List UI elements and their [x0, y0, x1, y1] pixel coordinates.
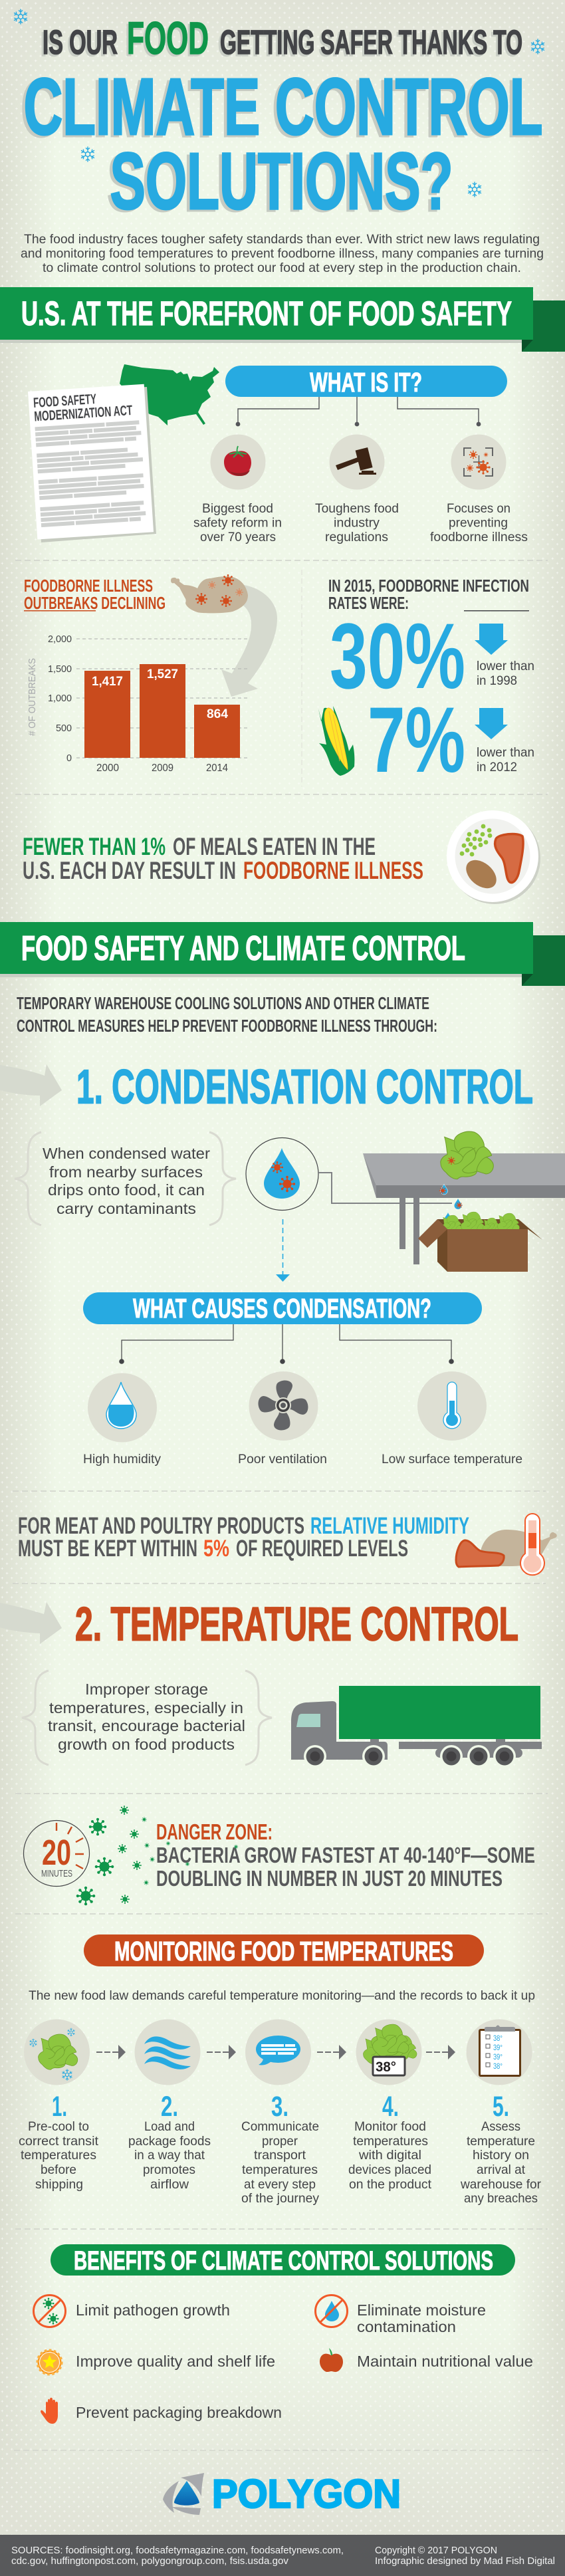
heading: outbreaks declining: [24, 576, 166, 613]
step 3 icon: [245, 2020, 311, 2085]
brace text: condensed water: drips onto food, it can: [48, 1181, 205, 1199]
footer: cdc.gov, huffingtonpost.com, polygongroup.com, fsis.usda.gov: [11, 2555, 288, 2567]
footer: Copyright © 2017 POLYGON: [375, 2545, 497, 2556]
step 4: monitor: with digital: [358, 2148, 421, 2163]
icon: 20 minute clock: 20: [42, 1833, 71, 1873]
axis title: # OF OUTBREAKS: [27, 658, 38, 736]
intro: temporary warehouse cooling: [17, 993, 437, 1036]
what is it captions: preventing: [449, 516, 508, 530]
heading: outbreaks declining: FOODBORNE ILLNESS: [24, 576, 153, 596]
benefit: improve quality: [37, 2351, 275, 2375]
what is it captions: [193, 501, 528, 544]
benefit: nutritional value: [320, 2348, 533, 2372]
step 2: load and package: in a way that: [134, 2148, 205, 2163]
what is it captions: Biggest food: [202, 501, 273, 516]
pill: what is it: [225, 366, 507, 398]
document: Food Safety Modernization Act: MODERNIZATION ACT: [34, 403, 133, 424]
banner: food safety and climate control: [0, 922, 565, 986]
brace text: condensed water: [15, 1132, 236, 1225]
axis labels: 1,500: [48, 664, 72, 675]
callout: fewer than 1 percent: OF MEALS EATEN IN THE: [173, 833, 376, 860]
title: [21, 13, 542, 228]
benefit: eliminate moisture contamination: contamination: [357, 2318, 456, 2335]
step 3: communicate: temperatures: [242, 2163, 318, 2177]
callout: relative humidity: FOR MEAT AND POULTRY PRODUCTS: [18, 1513, 304, 1539]
arrow: into temperature control: [0, 1602, 62, 1644]
stat: 30 percent: lower than: [477, 659, 534, 673]
icon: tomato: [210, 435, 266, 489]
step 3: communicate: at every step: [244, 2177, 316, 2192]
arrow: step 1 to 2: [96, 2045, 126, 2059]
step 5: assess: Assess: [481, 2119, 520, 2134]
callout: danger zone: [156, 1819, 535, 1891]
what is it captions: safety reform in: [193, 516, 282, 530]
title line one: FOOD: [125, 15, 207, 66]
brace text: improper storage: Improper storage: [85, 1681, 208, 1698]
icon: plate of food: [447, 810, 540, 904]
step 1 icon: [24, 2020, 90, 2085]
benefit: nutritional value: Maintain nutritional value: [357, 2353, 533, 2370]
benefit: eliminate moisture contamination: [315, 2295, 486, 2335]
document: Food Safety Modernization Act: [28, 384, 156, 542]
banner: U.S. at the forefront: [0, 287, 565, 352]
brace text: improper storage: temperatures, especially in: [49, 1699, 243, 1716]
step 5: assess: temperature: [467, 2134, 535, 2149]
intro paragraph: The food industry faces tougher safety standards than ever. With strict new laws regulating: [24, 232, 540, 247]
icon: meat, poultry and thermometer: [456, 1514, 557, 1575]
cardboard box: [418, 1212, 542, 1272]
icon: gavel: [330, 435, 384, 489]
title line one: [41, 13, 522, 66]
heading: infection rates: RATES WERE:: [328, 593, 409, 613]
step 5: assess: arrival at: [477, 2163, 526, 2177]
callout: fewer than 1 percent: U.S. EACH DAY RESULT IN: [23, 857, 236, 884]
axis labels: 500: [56, 723, 72, 734]
benefit: prevent packaging breakdown: Prevent packaging breakdown: [76, 2404, 282, 2421]
pill: what causes condensation: WHAT CAUSES CONDENSATION?: [133, 1293, 431, 1324]
step 3: communicate: 3.: [271, 2091, 288, 2123]
icon: stop hand: [41, 2398, 58, 2424]
benefit: limit pathogen growth: [33, 2295, 230, 2327]
footer: [0, 2535, 565, 2576]
what is it captions: industry: [334, 516, 380, 530]
step 5: assess: any breaches: [464, 2191, 538, 2206]
icon: apple: [320, 2348, 343, 2372]
step 5 icon: 38°: [493, 2034, 503, 2043]
arrow: chicken to chart: [221, 585, 277, 697]
stat: 7 percent: 7%: [368, 687, 465, 792]
brace text: improper storage: transit, encourage bacterial: [48, 1717, 245, 1734]
step 2: load and package: 2.: [161, 2091, 178, 2123]
icon: scanned bacteria: [451, 435, 507, 489]
brace text: improper storage: [22, 1671, 272, 1765]
icon: no moisture: [315, 2295, 347, 2327]
arrow: step 3 to 4: [317, 2045, 346, 2059]
step 3: communicate: of the journey: [241, 2191, 319, 2206]
callout: fewer than 1 percent: FOODBORNE ILLNESS: [243, 857, 423, 884]
step 5: assess: 5.: [493, 2091, 509, 2123]
step 1: pre-cool: [19, 2020, 99, 2192]
icon: corn: [318, 706, 354, 776]
connectors from what is it: [236, 397, 481, 426]
document: Food Safety Modernization Act: FOOD SAFETY: [33, 392, 97, 411]
axis labels: 0: [66, 753, 72, 764]
step 2: load and package: promotes: [143, 2163, 195, 2177]
year labels: 2014: [206, 762, 228, 774]
step 5: assess: warehouse for: [460, 2177, 541, 2192]
step 1: pre-cool: before: [41, 2163, 76, 2177]
callout: relative humidity: OF REQUIRED LEVELS: [236, 1536, 408, 1562]
icon: contaminated chicken: [171, 574, 248, 613]
callout: fewer than 1 percent: FEWER THAN 1%: [23, 833, 166, 860]
cause labels: High humidity: [83, 1452, 161, 1466]
callout: relative humidity: [18, 1513, 469, 1562]
benefit: limit pathogen growth: Limit pathogen growth: [76, 2301, 230, 2319]
step 1: pre-cool: Pre-cool to: [28, 2119, 89, 2134]
what is it captions: regulations: [325, 530, 388, 544]
icon: low surface thermometer: [417, 1371, 487, 1441]
step 1: pre-cool: shipping: [35, 2177, 83, 2192]
footer: Infographic designed by Mad Fish Digital: [375, 2555, 555, 2567]
title line one: IS OUR: [43, 23, 118, 61]
icon: 20 minute clock: [24, 1820, 89, 1887]
step 3: communicate: [241, 2020, 319, 2206]
cause labels: [83, 1452, 522, 1466]
what is it captions: Toughens food: [315, 501, 399, 516]
stat: 30 percent: in 1998: [477, 673, 517, 688]
year labels: 2000: [96, 762, 119, 774]
icon: multiplying bacteria: [76, 1806, 155, 1905]
axis labels: 1,000: [48, 693, 72, 704]
small bacteria over text: [166, 1841, 238, 1866]
benefit: improve quality: Improve quality and shelf life: [76, 2353, 275, 2370]
axis labels: [48, 634, 72, 764]
step 3: communicate: proper: [262, 2134, 298, 2149]
step 1: pre-cool: correct transit: [19, 2134, 99, 2149]
intro paragraph: and monitoring food temperatures to prevent foodborne illness, many companies are turning: [21, 246, 544, 261]
subheading: new food law: The new food law demands careful temperature monitoring—and the records to back it up: [29, 1988, 535, 2003]
step 2: load and package: Load and: [144, 2119, 195, 2134]
heading: outbreaks declining: OUTBREAKS DECLINING: [24, 593, 166, 613]
step 4: monitor: temperatures: [353, 2134, 428, 2149]
year labels: 2009: [152, 762, 173, 774]
step 5: assess: history on: [473, 2148, 529, 2163]
brace text: condensed water: from nearby surfaces: [49, 1163, 203, 1181]
title line one: FOOD: [127, 13, 209, 64]
step 1: pre-cool: 1.: [52, 2091, 67, 2123]
step 4: monitor: Monitor food: [354, 2119, 426, 2134]
icon: star sun: [37, 2351, 61, 2375]
icon: no pathogens: [33, 2295, 65, 2327]
step 5 icon: 39°: [493, 2052, 503, 2061]
callout: relative humidity: MUST BE KEPT WITHIN: [18, 1536, 197, 1562]
bar values: 1,417: [92, 674, 123, 689]
icon: snowflakes: [13, 9, 545, 197]
step 2: load and package: airflow: [150, 2177, 189, 2192]
callout: relative humidity: 5%: [203, 1536, 229, 1562]
benefit: eliminate moisture contamination: Eliminate moisture: [357, 2301, 486, 2319]
cause labels: Poor ventilation: [238, 1452, 327, 1466]
intro paragraph: [21, 232, 544, 275]
bar values: 1,527: [147, 667, 178, 681]
callout: danger zone: DANGER ZONE:: [156, 1819, 273, 1844]
intro paragraph: to climate control solutions to protect our food at every step in the production chain.: [43, 261, 521, 275]
step 4: monitor: devices placed: [348, 2163, 431, 2177]
illustration: refrigerated truck: [291, 1686, 542, 1768]
logo: Polygon: POLYGON: [212, 2472, 401, 2516]
step 5 icon: [467, 2020, 532, 2085]
bars: [84, 664, 240, 758]
step 4 icon: [356, 2020, 421, 2085]
icon: high humidity: [88, 1373, 157, 1443]
arrow: dashed down to causes: [276, 1219, 290, 1282]
what is it captions: over 70 years: [200, 530, 276, 544]
step 1: pre-cool: temperatures: [21, 2148, 96, 2163]
connectors from causes: [119, 1324, 454, 1364]
step 2: load and package: [128, 2020, 211, 2192]
step 5: assess: [460, 2020, 541, 2206]
step 4: monitor: 4.: [382, 2091, 399, 2123]
step 4 icon: 38°: [376, 2059, 396, 2075]
bar values: [92, 667, 228, 721]
footer: SOURCES: foodinsight.org, foodsafetymagazine.com, foodsafetynews.com,: [11, 2545, 344, 2556]
year labels: [96, 762, 228, 774]
step 2 icon: [134, 2020, 201, 2085]
brace text: condensed water: carry contaminants: [56, 1200, 196, 1217]
illustration: lettuce dripping on a table: [318, 1131, 565, 1272]
cause labels: Low surface temperature: [382, 1452, 522, 1466]
icon: contaminated water drop: [246, 1138, 318, 1210]
step 4: monitor: on the product: [349, 2177, 432, 2192]
step 3: communicate: Communicate: [241, 2119, 319, 2134]
step 4: monitor: [348, 2020, 432, 2192]
brace text: condensed water: When condensed water: [43, 1145, 210, 1162]
icon: ventilation fan: [249, 1371, 318, 1441]
step 5 icon: 39°: [493, 2043, 503, 2052]
stat: 7 percent: in 2012: [477, 760, 517, 774]
step 5 icon: 38°: [493, 2061, 503, 2071]
pill: what is it: WHAT IS IT?: [310, 367, 422, 398]
arrow: step 4 to 5: [426, 2045, 455, 2059]
benefit: prevent packaging breakdown: [41, 2398, 282, 2424]
title line one: IS OUR: [41, 25, 116, 63]
axis labels: 2,000: [48, 634, 72, 645]
pill: what causes condensation: [83, 1292, 482, 1324]
arrow: into condensation control: [0, 1064, 62, 1106]
what is it captions: foodborne illness: [430, 530, 528, 544]
icon: 20 minute clock: MINUTES: [41, 1868, 72, 1879]
callout: fewer than 1 percent: [23, 833, 423, 884]
heading: infection rates: [328, 576, 529, 613]
brace text: improper storage: growth on food products: [58, 1736, 235, 1753]
bar values: 864: [207, 707, 228, 721]
stat: 7 percent: lower than: [477, 745, 534, 760]
arrow: step 2 to 3: [207, 2045, 236, 2059]
bar chart: outbreaks: [27, 634, 249, 774]
step 2: load and package: package foods: [128, 2134, 211, 2149]
what is it captions: Focuses on: [447, 501, 510, 516]
callout: relative humidity: RELATIVE HUMIDITY: [310, 1513, 469, 1539]
icon: map of the United States: [120, 364, 219, 425]
stat: 30 percent: 30%: [330, 604, 465, 708]
step 3: communicate: transport: [254, 2148, 306, 2163]
